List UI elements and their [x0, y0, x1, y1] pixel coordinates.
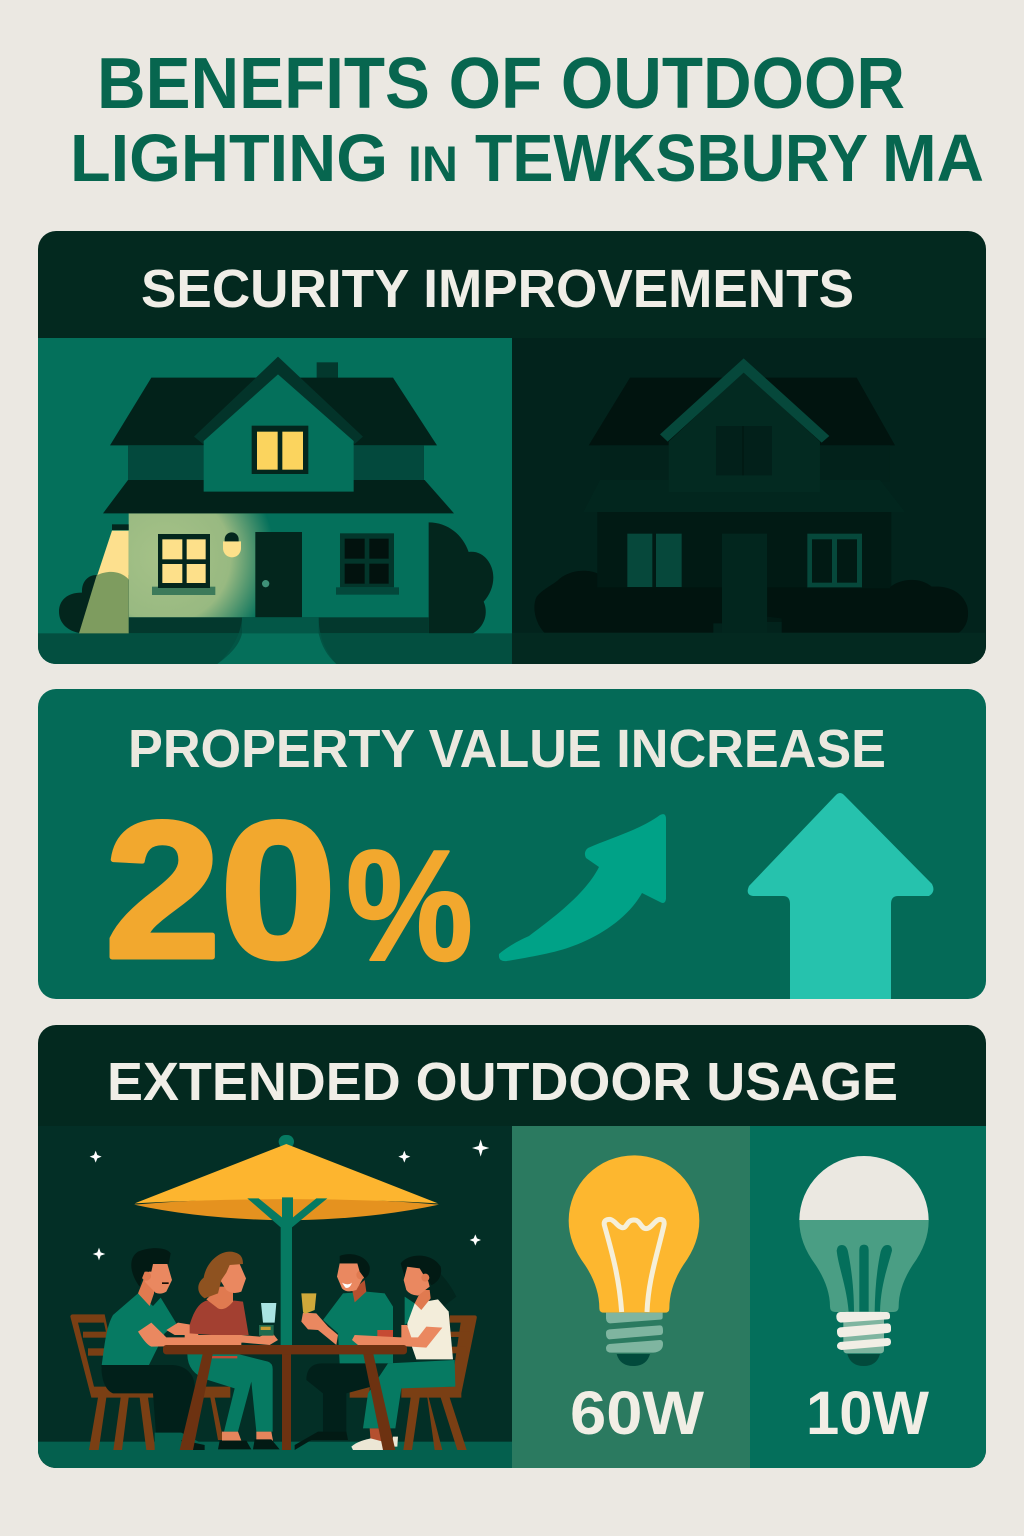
person: woman right — [351, 1256, 456, 1450]
chairs — [70, 1314, 477, 1450]
icon: curved growth arrow — [499, 814, 666, 961]
title: MA — [882, 121, 984, 196]
umbrella — [134, 1135, 439, 1345]
illustration: friends under umbrella — [38, 1135, 512, 1472]
title: BENEFITS OF OUTDOOR — [97, 44, 905, 124]
table — [163, 1345, 407, 1450]
heading: security improvements: SECURITY IMPROVEMENTS — [141, 259, 854, 319]
icon: LED bulb — [799, 1156, 929, 1366]
illustration: dark house — [512, 358, 985, 666]
person: man right — [295, 1254, 393, 1450]
title: LIGHTING — [70, 121, 388, 196]
title: TEWKSBURY — [475, 121, 868, 196]
person: man left — [101, 1248, 241, 1450]
icon: large up arrow — [748, 793, 933, 999]
title: IN — [408, 136, 458, 192]
label: 60W: 60W — [570, 1379, 704, 1447]
illustration: lit house — [38, 357, 512, 670]
glass: blue — [259, 1303, 276, 1336]
heading: extended outdoor usage: EXTENDED OUTDOOR USAGE — [107, 1052, 898, 1112]
icon: incandescent bulb — [569, 1155, 699, 1366]
stat: 20 percent: 20 — [105, 782, 336, 999]
panel: property value increase — [38, 689, 986, 999]
label: 10W: 10W — [806, 1379, 929, 1447]
title — [70, 44, 984, 196]
person: woman left — [185, 1252, 280, 1449]
panel: security improvements — [38, 231, 986, 670]
stat: 20 percent — [110, 819, 470, 962]
heading: property value increase: PROPERTY VALUE INCREASE — [128, 719, 886, 779]
panel: extended outdoor usage — [38, 1025, 986, 1472]
stars — [90, 1139, 489, 1260]
stat: 20 percent: % — [346, 818, 473, 994]
